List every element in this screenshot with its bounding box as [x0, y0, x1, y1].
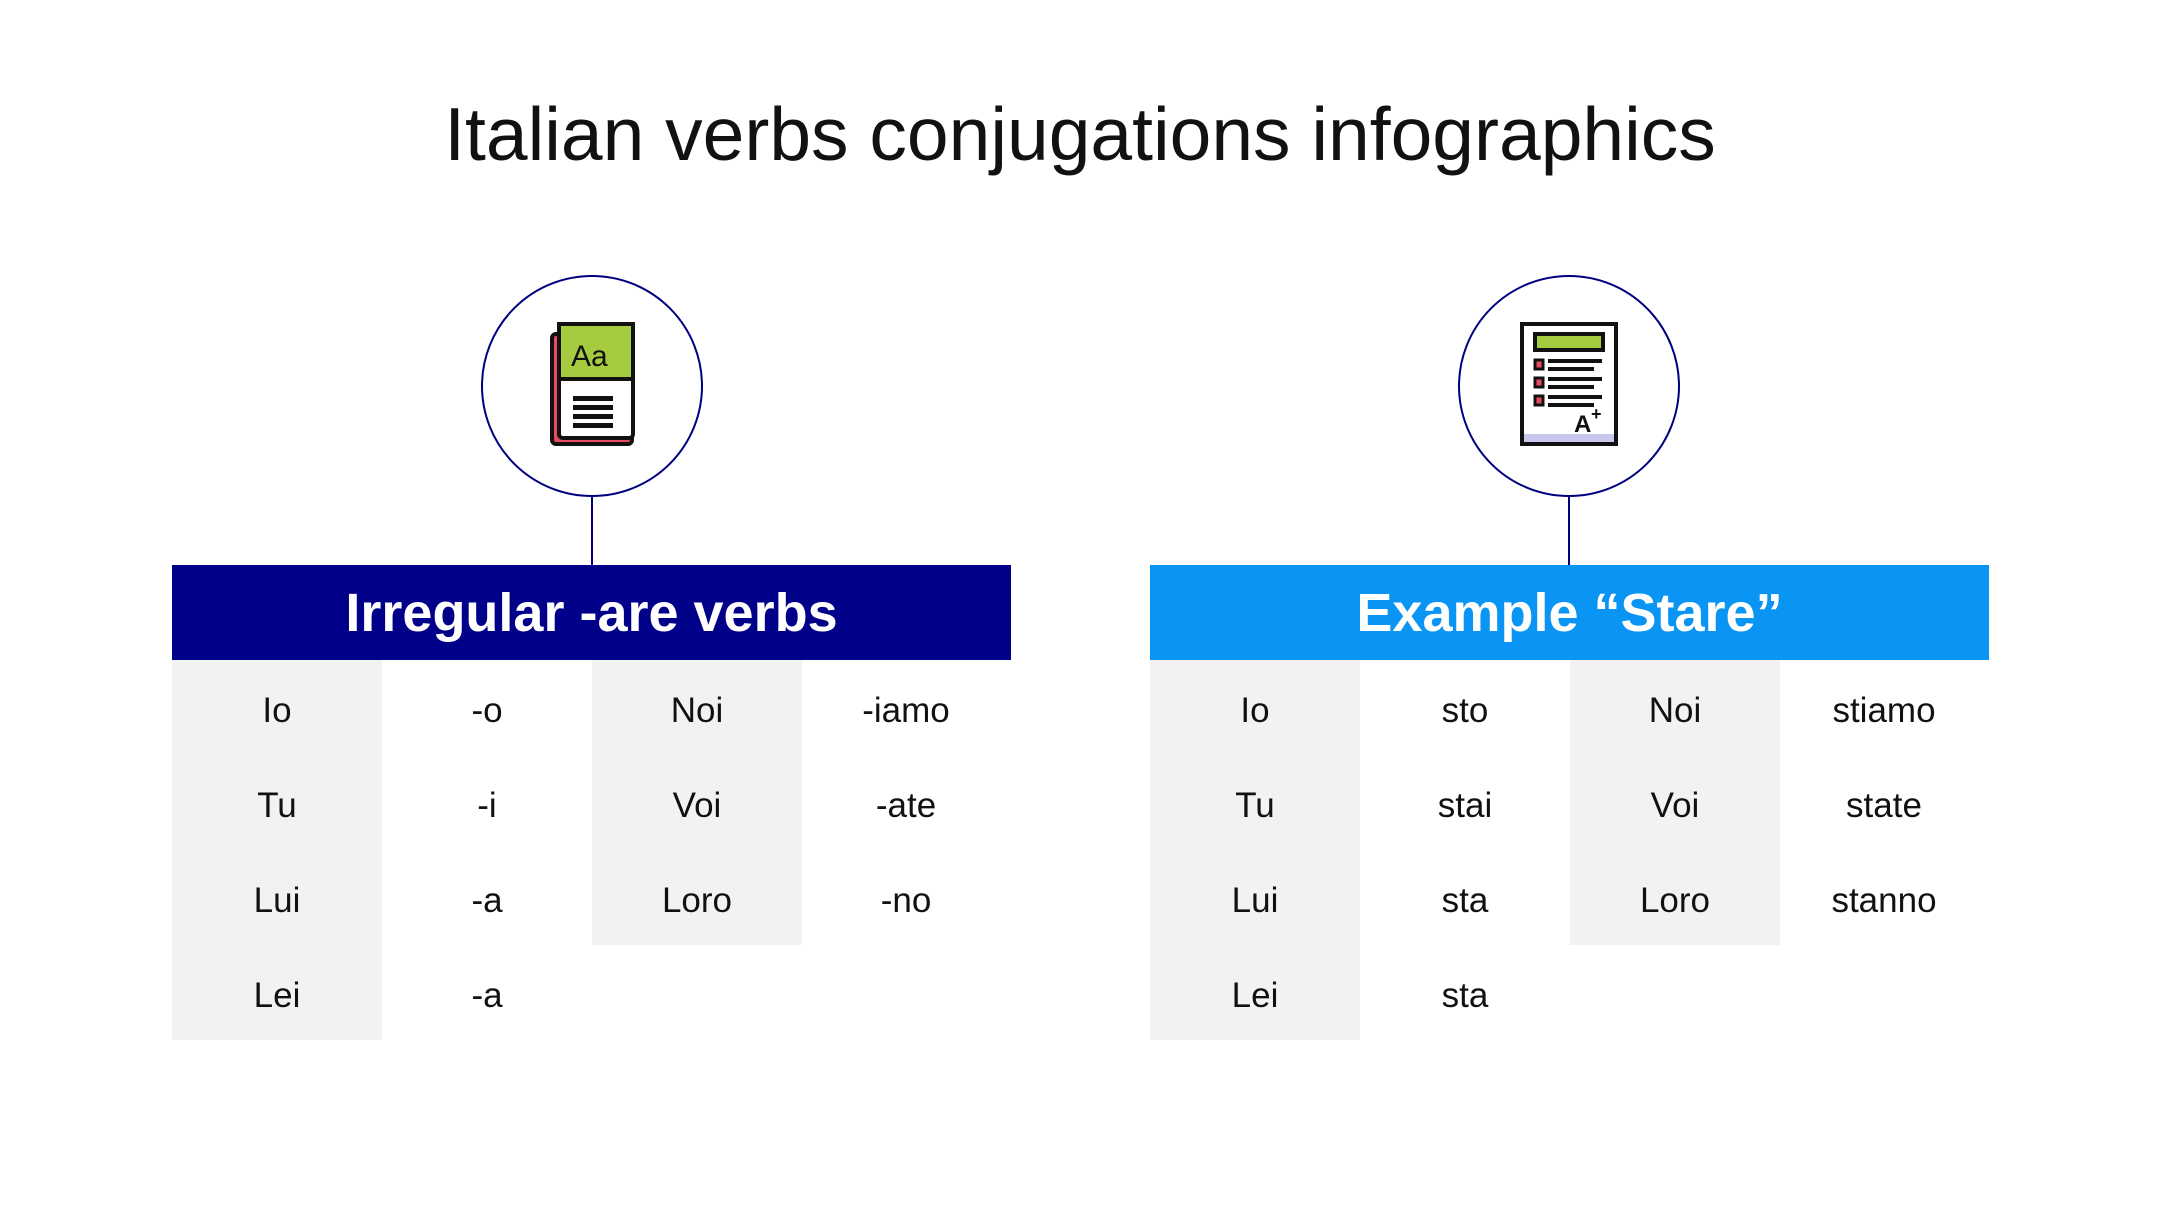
table: stare conjugation: Noi	[1649, 691, 1701, 730]
table: irregular endings: -i	[477, 786, 497, 825]
table: stare conjugation: sta	[1442, 881, 1488, 920]
icon: book	[550, 322, 635, 446]
header: Irregular -are verbs: Irregular -are verbs	[345, 583, 838, 643]
table: irregular endings	[172, 660, 950, 1040]
icon: test paper: +	[1591, 404, 1602, 424]
table: stare conjugation: Tu	[1235, 786, 1275, 825]
connector line right	[1568, 496, 1570, 566]
header: Irregular -are verbs	[172, 565, 1011, 660]
table: stare conjugation: Loro	[1640, 881, 1710, 920]
table: irregular endings: -a	[471, 976, 503, 1015]
table: stare conjugation: stai	[1438, 786, 1492, 825]
table: irregular endings: Noi	[671, 691, 723, 730]
connector line left	[591, 496, 593, 566]
table: stare conjugation: stanno	[1831, 881, 1937, 920]
table: irregular endings: Lui	[254, 881, 300, 920]
table: irregular endings: Tu	[257, 786, 297, 825]
icon: book: Aa	[571, 340, 608, 373]
table: stare conjugation: Voi	[1651, 786, 1699, 825]
title: Italian verbs conjugations infographics	[444, 92, 1716, 176]
table: irregular endings: -ate	[876, 786, 936, 825]
table: irregular endings: -no	[881, 881, 931, 920]
icon: test paper	[1520, 322, 1618, 446]
table: irregular endings: -iamo	[862, 691, 950, 730]
table: stare conjugation: Lui	[1232, 881, 1278, 920]
table: irregular endings: Loro	[662, 881, 732, 920]
table: irregular endings: Io	[262, 691, 292, 730]
icon circle: test paper	[1458, 275, 1680, 497]
table: irregular endings: Voi	[673, 786, 721, 825]
table: stare conjugation: Lei	[1232, 976, 1278, 1015]
table: stare conjugation: Io	[1240, 691, 1270, 730]
table: irregular endings: -a	[471, 881, 503, 920]
table: stare conjugation: sta	[1442, 976, 1488, 1015]
icon circle: book	[481, 275, 703, 497]
table: stare conjugation	[1150, 660, 1937, 1040]
table: stare conjugation: state	[1846, 786, 1922, 825]
icon: test paper: A	[1574, 411, 1591, 438]
header: Example Stare: Example “Stare”	[1356, 583, 1783, 643]
table: irregular endings: -o	[471, 691, 503, 730]
table: stare conjugation: stiamo	[1832, 691, 1936, 730]
header: Example Stare	[1150, 565, 1989, 660]
table: stare conjugation: sto	[1442, 691, 1488, 730]
table: irregular endings: Lei	[254, 976, 300, 1015]
